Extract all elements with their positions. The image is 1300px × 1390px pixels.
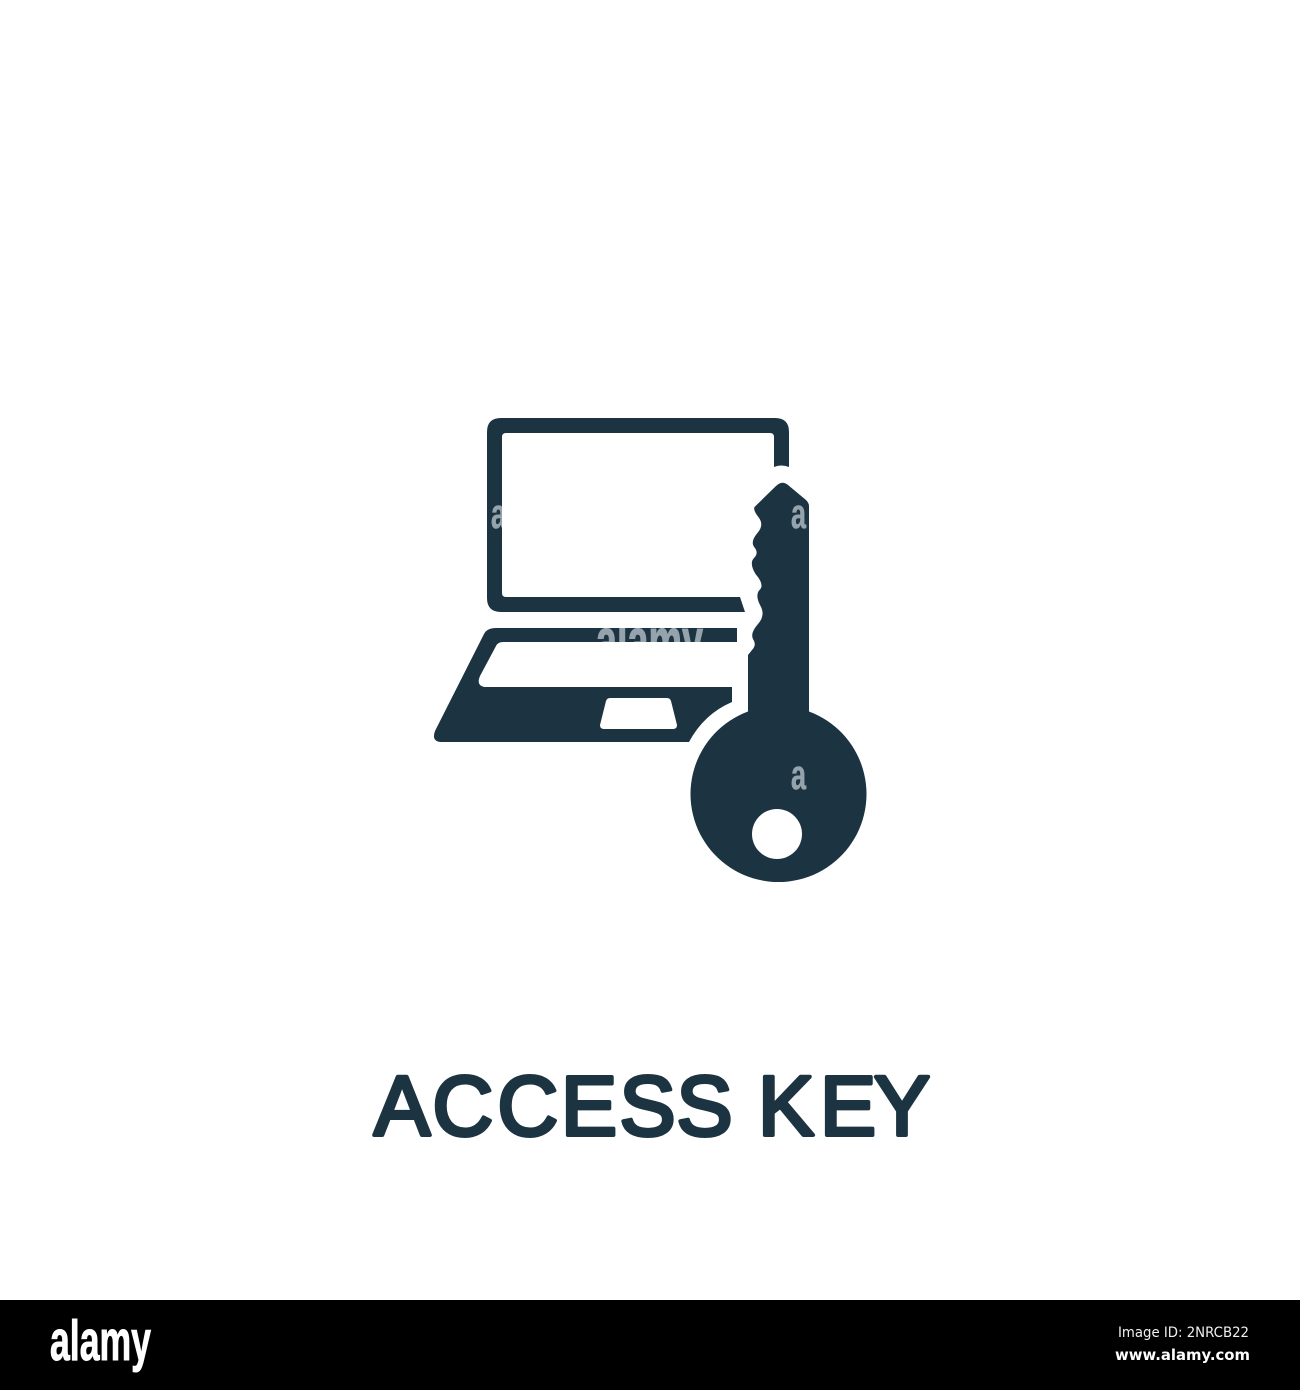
website: www.alamy.com (1115, 1346, 1250, 1364)
title: ACCESS KEY (374, 1059, 930, 1153)
image id: Image ID: 2NRCB22 (1118, 1325, 1249, 1341)
footer bar (0, 1300, 1300, 1390)
icon: laptop base with keyboard and touchpad (434, 628, 737, 742)
watermark: letter a on key shaft: a (791, 490, 806, 537)
icon: key (690, 483, 866, 882)
icon: laptop screen frame (487, 418, 789, 612)
watermark: letter a on screen frame: a (491, 490, 506, 537)
watermark: alamy on laptop base: alamy (596, 607, 703, 676)
infographic canvas (0, 418, 1300, 1390)
icon: laptop and key (434, 418, 866, 882)
watermark: letter a on key bow: a (791, 751, 806, 798)
footer logo: alamy (50, 1309, 151, 1373)
